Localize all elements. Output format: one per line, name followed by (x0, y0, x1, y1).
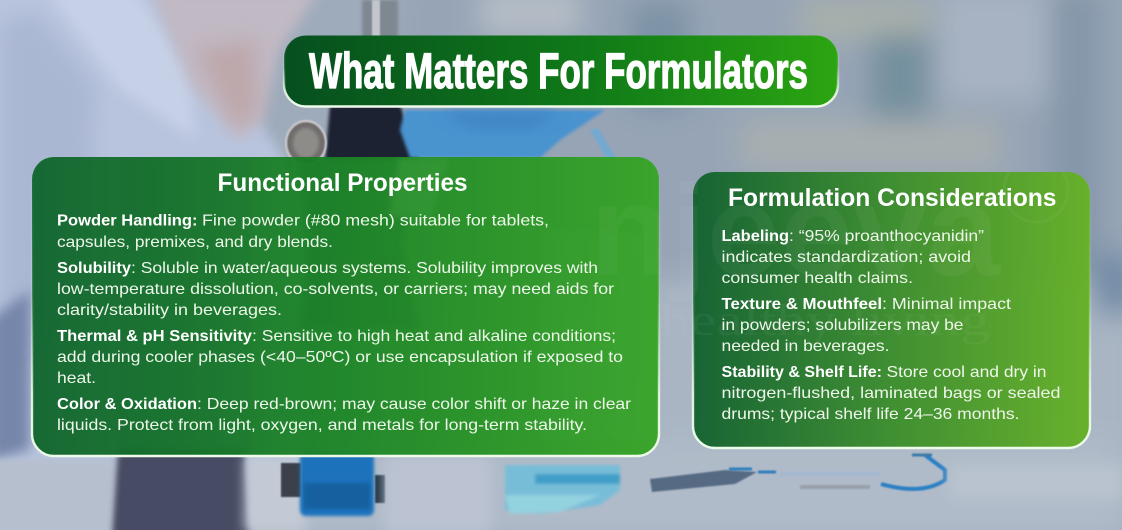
text block: labeling: indicates standardization; avoid (722, 249, 971, 266)
text block: stability and shelf life: Store cool and dry in (886, 364, 1046, 381)
heading: Formulation Considerations (728, 184, 1056, 212)
text block: stability and shelf life: nitrogen-flushed, laminated bags or sealed (722, 385, 1060, 402)
blue bottle (281, 452, 490, 530)
tweezers (650, 470, 757, 492)
text block: solubility (57, 260, 615, 319)
text block: texture and mouthfeel: Texture & Mouthfeel (722, 296, 882, 313)
text block: solubility: clarity/stability in beverages. (57, 302, 282, 319)
text block: color and oxidation: : Deep red-brown; may cause color shift or haze in clear (197, 396, 632, 413)
text block: texture and mouthfeel: needed in beverages. (722, 338, 890, 355)
watermark inside panel (693, 172, 1070, 344)
text block: stability and shelf life: Stability & Shelf Life: (722, 364, 882, 381)
text block: solubility: Solubility (57, 260, 131, 277)
text block: color and oxidation: Color & Oxidation (57, 396, 197, 413)
text block: stability and shelf life: drums; typical shelf life 24–36 months. (722, 406, 1020, 423)
blue tray (505, 465, 620, 514)
pipette (590, 128, 616, 158)
title: What Matters For Formulators (309, 43, 808, 99)
panel: functional properties (32, 157, 659, 457)
bench surface (0, 460, 125, 530)
text block: powder handling: Powder Handling: (57, 212, 198, 230)
blue tubing (729, 455, 945, 500)
text block: powder handling: Fine powder (#80 mesh) suitable for tablets, (202, 212, 549, 230)
text block: powder handling: capsules, premixes, and dry blends. (57, 234, 333, 251)
microscope body (325, 105, 420, 160)
text block: labeling: consumer health claims. (722, 270, 913, 287)
microscope knob (286, 121, 326, 165)
text block: color and oxidation: liquids. Protect from light, oxygen, and metals for long-term stability. (57, 417, 587, 434)
panel: formulation considerations (692, 172, 1092, 450)
heading: Functional Properties (218, 169, 468, 197)
text block: labeling (722, 228, 984, 287)
text block: stability and shelf life (722, 364, 1060, 423)
gloved hand (400, 110, 605, 158)
text block: texture and mouthfeel: : Minimal impact (882, 296, 1012, 313)
text block: thermal and pH sensitivity: : Sensitive to high heat and alkaline conditions; (252, 328, 616, 345)
text block: solubility: : Soluble in water/aqueous systems. Solubility improves with (131, 260, 598, 277)
skin at the neck (150, 0, 320, 138)
lab coat (0, 0, 300, 470)
watermark inside panel: healthy living (660, 296, 990, 345)
faint microscope seen through panel (397, 164, 440, 212)
text block: thermal and pH sensitivity: add during cooler phases (<40–50ºC) or use encapsulation if exposed to (57, 349, 623, 366)
microscope column (362, 0, 398, 40)
watermark: healthy living (660, 296, 990, 345)
text block: labeling: Labeling (722, 228, 789, 245)
text block: texture and mouthfeel (722, 296, 1012, 355)
title badge (284, 36, 838, 106)
text block: labeling: : “95% proanthocyanidin” (789, 228, 984, 245)
text block: solubility: low-temperature dissolution, co-solvents, or carriers; may need aids for (57, 281, 615, 298)
text block: thermal and pH sensitivity: heat. (57, 370, 96, 387)
watermark inside panel: njeeva (590, 157, 1002, 303)
text block: powder handling (57, 212, 549, 251)
text block: color and oxidation (57, 396, 632, 434)
text block: texture and mouthfeel: in powders; solubilizers may be (722, 317, 964, 334)
watermark: njeeva (590, 157, 1002, 303)
dark jar (112, 450, 250, 530)
text block: thermal and pH sensitivity (57, 328, 623, 387)
text block: thermal and pH sensitivity: Thermal & pH Sensitivity (57, 328, 252, 345)
